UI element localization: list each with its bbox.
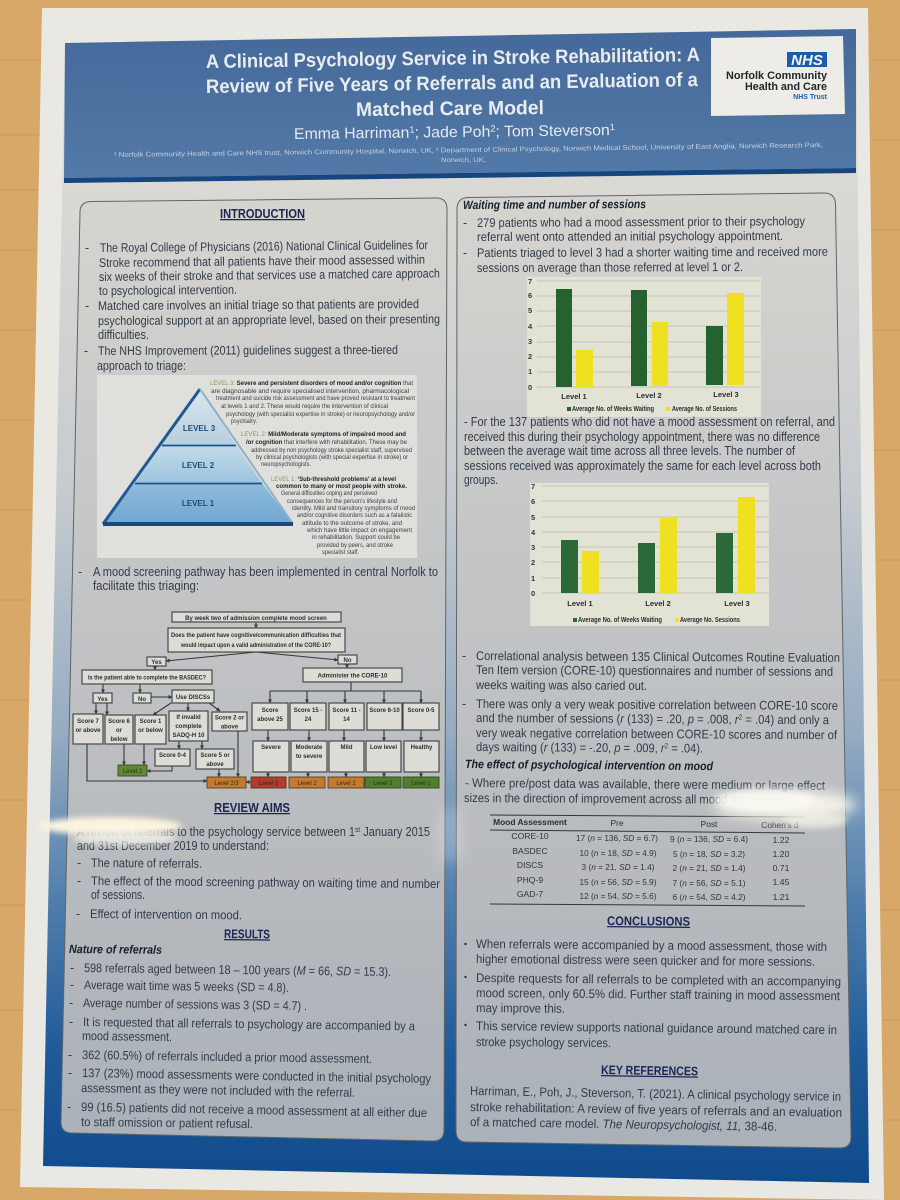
- flow boxes: left branch: If invalid: [176, 715, 201, 721]
- text: level 3 description: LEVEL 3: Severe and persistent disorders of mood and/or cognition that: [210, 381, 413, 387]
- title: [206, 44, 700, 121]
- table header: Mood Assessment: [493, 817, 567, 827]
- text block: nature of referrals bullets: to staff omission or patient refusal.: [81, 1115, 253, 1131]
- text block: correlational analysis: -: [462, 649, 466, 663]
- logo: NHS Norfolk Community Health and Care: Norfolk Community: [726, 70, 828, 82]
- subheading: effect of psychological intervention: The effect of psychological intervention on mood: [465, 757, 714, 773]
- flow boxes: outcome levels: Level 2: [123, 769, 143, 775]
- text block: nature of referrals bullets: -: [67, 1100, 71, 1114]
- text block: conclusions bullets: This service review supports national guidance around matched care in: [476, 1019, 837, 1037]
- text: level 2 description: LEVEL 2: Mild/Moderate symptoms of impaired mood and: [241, 432, 406, 438]
- bar chart: patients with prior mood assessment: [527, 277, 761, 417]
- table row: BASDEC: 1.20: [773, 849, 790, 859]
- table header: Post: [701, 819, 718, 829]
- title: Review of Five Years of Referrals and an Evaluation of a: [206, 69, 698, 98]
- flow boxes: right branch scores: Low level: [370, 745, 397, 751]
- text: level 1 description: in rehabilitation. Support could be: [312, 535, 401, 541]
- flow boxes: outcome levels: [118, 765, 439, 788]
- flow boxes: right branch scores: Severe: [261, 745, 282, 751]
- flow arrows: [87, 622, 421, 782]
- flow boxes: right branch scores: Score 11 -: [332, 708, 361, 714]
- heading: introduction: INTRODUCTION: [220, 207, 305, 221]
- table row: CORE-10: CORE-10: [511, 831, 549, 841]
- text block: nature of referrals bullets: -: [69, 996, 73, 1010]
- flow boxes: right branch scores: Healthy: [411, 745, 433, 751]
- flow boxes: right branch scores: above 25: [257, 717, 284, 723]
- text: level 1 description: LEVEL 1: ‘Sub-threshold problems’ at a level: [271, 477, 396, 483]
- text block: waiting time bullets: -: [463, 216, 467, 230]
- text block: nature of referrals bullets: mood assessment.: [82, 1029, 172, 1044]
- table row: DISCS: 3 (n = 21, SD = 1.4): [582, 862, 655, 872]
- text block: introduction bullets: Matched care involves an initial triage so that patients are provided: [98, 297, 419, 313]
- table header: Pre: [610, 818, 624, 828]
- text: level 2 description: addressed by non psychology stroke specialist staff, supervised: [251, 448, 412, 454]
- flow boxes: left branch: Score 1: [140, 719, 162, 725]
- text block: mood screening pathway intro: A mood screening pathway has been implemented in central Norfolk to: [93, 565, 438, 579]
- logo: NHS Norfolk Community Health and Care: NHS Trust: [793, 94, 828, 101]
- text block: nature of referrals bullets: assessment as they were not included with the referral.: [81, 1081, 355, 1100]
- flow boxes: left branch: or above: [75, 728, 101, 734]
- text block: patients without prior assessment: groups.: [464, 473, 498, 487]
- table row: DISCS: [517, 860, 790, 873]
- table row: PHQ-9: 7 (n = 56, SD = 5.1): [672, 878, 746, 888]
- text block: introduction bullets: The Royal College of Physicians (2016) National Clinical Guidelines for: [100, 238, 428, 255]
- text block: review aims: Effect of intervention on mood.: [90, 907, 242, 922]
- text block: waiting time bullets: [463, 214, 828, 275]
- bar chart: patients with prior mood assessment: 1: [528, 367, 532, 376]
- flow boxes: top questions: would impact upon a valid administration of the CORE-10?: [180, 643, 331, 649]
- text block: reference citation: of a matched care model. The Neuropsychologist, 11, 38-46.: [470, 1115, 777, 1134]
- affiliations: [114, 142, 823, 164]
- text block: review aims: of sessions.: [91, 888, 145, 902]
- text block: review aims: The effect of the mood screening pathway on waiting time and number: [91, 874, 440, 891]
- text block: conclusions bullets: stroke psychology services.: [476, 1035, 611, 1050]
- heading: results: RESULTS: [224, 927, 270, 941]
- flow boxes: right branch scores: Score 0-5: [407, 708, 435, 714]
- text block: introduction bullets: difficulties.: [98, 328, 149, 342]
- flow boxes: top questions: Does the patient have cognitive/communication difficulties that: [171, 633, 341, 639]
- text block: correlational analysis: days waiting (r (133) = -.20, p = .009, r: [476, 740, 665, 755]
- text: level 3 description: are diagnosable and require specialised intervention, pharmacological: [211, 389, 409, 395]
- flow boxes: right branch scores: Moderate: [296, 745, 323, 751]
- text: level 1 description: provided by peers, and stroke: [317, 543, 394, 549]
- bar chart: patients assessed at appointment: 6: [531, 497, 535, 506]
- text block: correlational analysis: = .04) and only a: [742, 713, 829, 727]
- text block: pre/post effect sizes: - Where pre/post data was available, there were medium or large effect: [465, 776, 826, 793]
- text block: conclusions bullets: [464, 937, 841, 1050]
- text block: patients without prior assessment: between the average wait time across all three levels. The number of: [464, 444, 795, 458]
- text block: correlational analysis: = .04).: [668, 741, 703, 756]
- text block: introduction bullets: six weeks of their stroke and that services use a matched care approach: [99, 266, 440, 284]
- flow boxes: right branch scores: [252, 703, 439, 772]
- text block: reference citation: Harriman, E., Poh, J., Steverson, T. (2021). A clinical psychology service in: [470, 1084, 841, 1104]
- flow boxes: left branch: Score 6: [108, 719, 130, 725]
- text: level 1 description: attitude to the outcome of stroke, and: [302, 521, 402, 527]
- text: level 3 description: psychology (with specialist expertise in stroke) or neuropsychology and/or: [226, 412, 415, 418]
- text block: review aims: and 31st December 2019 to understand:: [77, 839, 269, 853]
- text block: nature of referrals bullets: It is requested that all referrals to psychology are accompanied by a: [83, 1015, 415, 1033]
- text block: correlational analysis: [462, 649, 840, 756]
- bar chart: patients with prior mood assessment: 5: [528, 306, 532, 315]
- bar chart: patients assessed at appointment: Level 1: [567, 599, 593, 608]
- text block: introduction bullets: [84, 238, 440, 373]
- text block: conclusions bullets: may improve this.: [476, 1001, 565, 1016]
- text: level 1 description: specialist staff.: [322, 550, 359, 556]
- bar chart: patients with prior mood assessment: Average No. of Weeks Waiting: [572, 406, 654, 413]
- text block: reference citation: [470, 1084, 842, 1134]
- flow boxes: left branch: complete: [175, 724, 202, 730]
- table row: BASDEC: BASDEC: [512, 846, 548, 856]
- authors: 1: [409, 125, 415, 135]
- bar chart: patients with prior mood assessment: 7: [528, 277, 532, 286]
- flow boxes: outcome levels: Level 3: [259, 781, 279, 787]
- table row: GAD-7: 6 (n = 54, SD = 4.2): [672, 892, 746, 902]
- flow boxes: top questions: By week two of admission complete mood screen: [185, 616, 327, 622]
- bar chart: patients with prior mood assessment: 3: [528, 337, 532, 346]
- bar chart: patients assessed at appointment: 0: [531, 589, 535, 598]
- text block: correlational analysis: Correlational analysis between 135 Clinical Outcomes Routine Evaluation: [476, 649, 840, 665]
- flow boxes: left branch: Use DISCSs: [176, 695, 211, 701]
- text block: correlational analysis: Ten Item version (CORE-10) questionnaires and number of sessions and: [476, 663, 833, 679]
- table row: PHQ-9: 15 (n = 56, SD = 5.9): [580, 877, 657, 887]
- table row: BASDEC: [512, 846, 790, 859]
- table row: CORE-10: [511, 831, 790, 845]
- flow boxes: left branch: [73, 690, 247, 769]
- table row: CORE-10: 17 (n = 136, SD = 6.7): [576, 833, 658, 843]
- text: level 1 description: and/or cognitive disorders such as a fatalistic: [297, 513, 412, 519]
- text block: conclusions bullets: higher emotional distress were seen quicker and for more sessions.: [476, 952, 815, 969]
- bar chart: patients with prior mood assessment: Average No. of Sessions: [672, 406, 737, 413]
- text block: correlational analysis: weeks waiting was also caried out.: [475, 678, 647, 693]
- text block: conclusions bullets: Despite requests for all referrals to be completed with an accompanying: [476, 971, 841, 989]
- flow boxes: outcome levels: Level 2: [336, 781, 356, 787]
- text block: patients without prior assessment: [464, 415, 835, 487]
- text block: correlational analysis: very weak negative correlation between CORE-10 scores and number of: [476, 726, 838, 742]
- heading: conclusions: CONCLUSIONS: [607, 914, 690, 929]
- text block: review aims: January 2015: [360, 825, 430, 839]
- text block: review aims: -: [77, 874, 81, 888]
- table row: GAD-7: GAD-7: [517, 889, 543, 899]
- flow boxes: top questions: Administer the CORE-10: [318, 674, 388, 680]
- logo: NHS Norfolk Community Health and Care: [711, 36, 845, 116]
- flow boxes: outcome levels: Level 2: [297, 781, 317, 787]
- text block: introduction bullets: -: [85, 241, 89, 255]
- flow boxes: right branch scores: 14: [343, 717, 350, 723]
- logo: NHS Norfolk Community Health and Care: Health and Care: [745, 81, 827, 93]
- text: level 3 description: at levels 1 and 2. These would require the intervention of clinical: [221, 404, 388, 410]
- text block: nature of referrals bullets: 137 (23%) mood assessments were conducted in the initial psychology: [82, 1066, 432, 1086]
- text: level 2 description: /or cognition that interfere with rehabilitation. These may be: [246, 440, 408, 446]
- flow boxes: top questions: Is the patient able to complete the BASDEC?: [88, 676, 206, 682]
- pyramid: LEVEL 3: [183, 424, 216, 433]
- pyramid: [103, 389, 293, 526]
- text block: nature of referrals bullets: -: [69, 1015, 73, 1029]
- text: level 3 description: treatment and suicide risk assessment and have proved resistant to treatment: [216, 396, 415, 402]
- text: level 2 description: by clinical psychologists (with special expertise in stroke) or: [256, 455, 408, 461]
- text block: pre/post effect sizes: sizes in the direction of improvement across all mood assessments.: [464, 791, 799, 807]
- text block: correlational analysis: and the number of sessions (r (133) = .20, p = .008, r: [476, 711, 739, 727]
- text block: correlational analysis: -: [462, 697, 466, 711]
- text block: nature of referrals bullets: 598 referrals aged between 18 – 100 years (M = 66, SD = 15.3).: [84, 961, 391, 979]
- text block: introduction bullets: to psychological intervention.: [99, 283, 237, 298]
- table row: GAD-7: 12 (n = 54, SD = 5.6): [580, 891, 657, 901]
- text: level 3 description: [210, 381, 415, 425]
- bar chart: patients assessed at appointment: Level 2: [645, 599, 671, 608]
- table row: BASDEC: 10 (n = 18, SD = 4.9): [580, 848, 657, 858]
- flow boxes: left branch: or: [116, 728, 123, 734]
- logo: NHS Norfolk Community Health and Care: NHS: [791, 52, 823, 69]
- text: level 1 description: General difficulties coping and perceived: [281, 491, 377, 497]
- affiliations: Norwich, UK,: [441, 157, 486, 164]
- text block: introduction bullets: -: [84, 344, 88, 358]
- flow boxes: left branch: Score 5 or: [200, 753, 230, 759]
- subheading: waiting time and number of sessions: Waiting time and number of sessions: [463, 197, 646, 212]
- panel: right column: [456, 193, 851, 1148]
- text block: waiting time bullets: sessions on average than those referred at level 1 or 2.: [477, 260, 743, 275]
- bar chart: patients assessed at appointment: [530, 482, 769, 626]
- bar chart: patients assessed at appointment: 5: [531, 513, 535, 522]
- text block: nature of referrals bullets: -: [68, 1066, 72, 1080]
- bar chart: patients assessed at appointment: Average No. Sessions: [680, 617, 740, 624]
- pyramid: LEVEL 2: [182, 461, 215, 470]
- text block: correlational analysis: 2: [738, 713, 742, 722]
- bar chart: patients with prior mood assessment: 0: [528, 383, 532, 392]
- text block: nature of referrals bullets: Average wait time was 5 weeks (SD = 4.8).: [84, 978, 289, 995]
- table header: Cohen's d: [761, 820, 799, 830]
- title: Matched Care Model: [356, 97, 544, 121]
- text block: mood screening pathway intro: facilitate this triaging:: [93, 579, 199, 593]
- text: level 2 description: neuropsychologists.: [261, 462, 311, 468]
- bar chart: patients with prior mood assessment: 6: [528, 291, 532, 300]
- diagram: three-tier triage pyramid: [97, 375, 417, 558]
- text: level 2 description: [241, 432, 412, 468]
- text block: correlational analysis: There was only a very weak positive correlation between CORE-10 score: [476, 697, 838, 713]
- text block: correlational analysis: 2: [665, 741, 668, 750]
- flow boxes: top questions: Yes: [151, 660, 162, 666]
- bar chart: patients with prior mood assessment: Level 2: [636, 391, 662, 400]
- flow boxes: right branch scores: Score: [262, 708, 279, 714]
- table row: GAD-7: 1.21: [773, 892, 790, 902]
- text block: waiting time bullets: 279 patients who had a mood assessment prior to their psychology: [477, 214, 806, 230]
- flow boxes: left branch: Score 0-4: [159, 753, 187, 759]
- bar chart: patients assessed at appointment: 7: [531, 482, 535, 491]
- text: level 1 description: [271, 477, 415, 556]
- heading: review aims: REVIEW AIMS: [214, 801, 290, 815]
- flow boxes: left branch: below: [110, 737, 128, 743]
- authors: Emma Harriman: [294, 125, 407, 143]
- text block: conclusions bullets: mood screen, only 60.5% did. Further staff training in mood assessment: [476, 986, 841, 1003]
- bar chart: patients with prior mood assessment: 4: [528, 322, 533, 331]
- authors: 1: [610, 122, 615, 132]
- text block: waiting time bullets: -: [463, 246, 467, 260]
- flow boxes: left branch: SADQ-H 10: [172, 733, 205, 739]
- table row: DISCS: DISCS: [517, 860, 543, 870]
- flow boxes: left branch: above: [206, 762, 224, 768]
- text: level 1 description: consequences for the person’s lifestyle and: [287, 499, 397, 505]
- table row: DISCS: 0.71: [773, 863, 790, 873]
- table row: PHQ-9: PHQ-9: [517, 875, 543, 885]
- table row: DISCS: 2 (n = 21, SD = 1.4): [672, 863, 746, 873]
- text block: reference citation: stroke rehabilitation: A review of five years of referrals and an evaluation: [470, 1100, 842, 1120]
- table row: GAD-7: [517, 889, 790, 902]
- text block: nature of referrals bullets: -: [70, 961, 74, 975]
- bar chart: patients with prior mood assessment: Level 3: [713, 390, 739, 399]
- text block: nature of referrals bullets: Average number of sessions was 3 (SD = 4.7) .: [83, 996, 307, 1013]
- text: level 1 description: which have little impact on engagement: [306, 528, 412, 534]
- flow boxes: outcome levels: Level 1: [411, 781, 431, 787]
- text block: introduction bullets: The NHS Improvement (2011) guidelines suggest a three-tiered: [98, 343, 398, 358]
- pyramid: LEVEL 1: [182, 499, 215, 508]
- text block: waiting time bullets: Patients triaged to level 3 had a shorter waiting time and received more: [477, 245, 828, 260]
- flow boxes: top questions: No: [344, 658, 352, 664]
- flow boxes: right branch scores: Mild: [340, 745, 353, 751]
- bar chart: patients assessed at appointment: 4: [531, 528, 536, 537]
- authors: ; Tom Steverson: [495, 122, 610, 141]
- light glare on laminate, left: [38, 805, 462, 865]
- text block: patients without prior assessment: sessions received was approximately the same for each level across both: [464, 459, 821, 473]
- table row: CORE-10: 9 (n = 136, SD = 6.4): [670, 834, 748, 844]
- table row: PHQ-9: [517, 875, 790, 888]
- table row: PHQ-9: 1.45: [773, 877, 790, 887]
- authors: ; Jade Poh: [414, 124, 490, 142]
- text block: conclusions bullets: When referrals were accompanied by a mood assessment, those with: [476, 937, 827, 954]
- text block: review aims: The nature of referrals.: [91, 856, 202, 871]
- flow boxes: left branch: Yes: [97, 697, 108, 703]
- text: level 1 description: common to many or most people with stroke.: [276, 484, 407, 490]
- heading: key references: KEY REFERENCES: [601, 1063, 698, 1079]
- text block: nature of referrals bullets: -: [70, 978, 74, 992]
- text block: introduction bullets: Stroke recommend that all patients have their mood assessed within: [99, 253, 425, 270]
- flow boxes: left branch: No: [138, 697, 146, 703]
- text block: review aims: A review of referrals to the psychology service between 1: [77, 825, 392, 839]
- text block: introduction bullets: approach to triage:: [97, 359, 186, 373]
- subheading: nature of referrals: Nature of referrals: [69, 942, 162, 957]
- text block: nature of referrals bullets: [67, 961, 432, 1131]
- text block: review aims: [76, 825, 440, 922]
- flow boxes: right branch scores: Score 6-10: [369, 708, 400, 714]
- text block: review aims: -: [77, 856, 81, 870]
- table header: [493, 817, 799, 830]
- text block: pre/post effect sizes: [464, 776, 826, 807]
- text block: introduction bullets: psychological support at an appropriate level, based on their presenting: [98, 312, 440, 328]
- flow boxes: top questions: [82, 612, 402, 684]
- flow boxes: left branch: or below: [138, 728, 163, 734]
- flow boxes: right branch scores: Score 15 -: [294, 708, 322, 714]
- text block: mood screening pathway intro: -: [78, 565, 82, 579]
- text: level 1 description: identity. Mild and transitory symptoms of mood: [292, 506, 415, 512]
- light glare on laminate, right: [713, 790, 857, 828]
- flow boxes: right branch scores: to severe: [296, 754, 323, 760]
- bar chart: patients assessed at appointment: 3: [531, 543, 535, 552]
- table: mood assessment pre and post scores: [490, 815, 805, 906]
- table row: CORE-10: 1.22: [773, 835, 790, 845]
- text block: introduction bullets: -: [85, 299, 89, 313]
- bar chart: patients assessed at appointment: 1: [531, 574, 535, 583]
- text: level 3 description: psychiatry.: [231, 419, 257, 425]
- text block: mood screening pathway intro: [78, 565, 438, 593]
- panel: left column: [61, 198, 447, 1141]
- title: A Clinical Psychology Service in Stroke Rehabilitation: A: [206, 44, 700, 73]
- bar chart: patients assessed at appointment: Average No. of Weeks Waiting: [578, 617, 662, 624]
- text block: nature of referrals bullets: 99 (16.5) patients did not receive a mood assessment at all either due: [81, 1100, 427, 1120]
- text block: review aims: -: [76, 907, 80, 921]
- flow boxes: outcome levels: Level 2/3: [214, 781, 239, 787]
- table row: BASDEC: 5 (n = 18, SD = 3.2): [673, 849, 745, 859]
- text block: nature of referrals bullets: -: [68, 1048, 72, 1062]
- flowchart: mood screening pathway: [73, 612, 439, 788]
- flow boxes: left branch: Score 7: [77, 719, 99, 725]
- text block: waiting time bullets: referral went onto attended an initial psychology appointment.: [477, 229, 783, 244]
- flow boxes: outcome levels: Level 1: [373, 781, 393, 787]
- flow boxes: left branch: above: [221, 724, 239, 730]
- text block: patients without prior assessment: - For the 137 patients who did not have a mood assessment on referral, and: [464, 415, 835, 429]
- flow boxes: left branch: Score 2 or: [215, 716, 245, 722]
- header banner: [64, 29, 856, 183]
- bar chart: patients with prior mood assessment: 2: [528, 352, 532, 361]
- authors: 2: [490, 124, 495, 134]
- bar chart: patients assessed at appointment: 2: [531, 558, 535, 567]
- affiliations: ¹ Norfolk Community Health and Care NHS trust, Norwich Community Hospital, Norwich, UK, ² Department of Clinical Psychology, Norwich Medical School, University of East Anglia, Norwich Research Park,: [114, 142, 823, 159]
- flow boxes: right branch scores: 24: [305, 717, 312, 723]
- bar chart: patients assessed at appointment: Level 3: [724, 599, 750, 608]
- bar chart: patients with prior mood assessment: Level 1: [561, 392, 587, 401]
- text block: nature of referrals bullets: 362 (60.5%) of referrals included a prior mood assessment.: [82, 1048, 372, 1066]
- text block: patients without prior assessment: received this during their psychology appointment, there was no difference: [464, 430, 820, 444]
- text block: review aims: st: [355, 825, 361, 834]
